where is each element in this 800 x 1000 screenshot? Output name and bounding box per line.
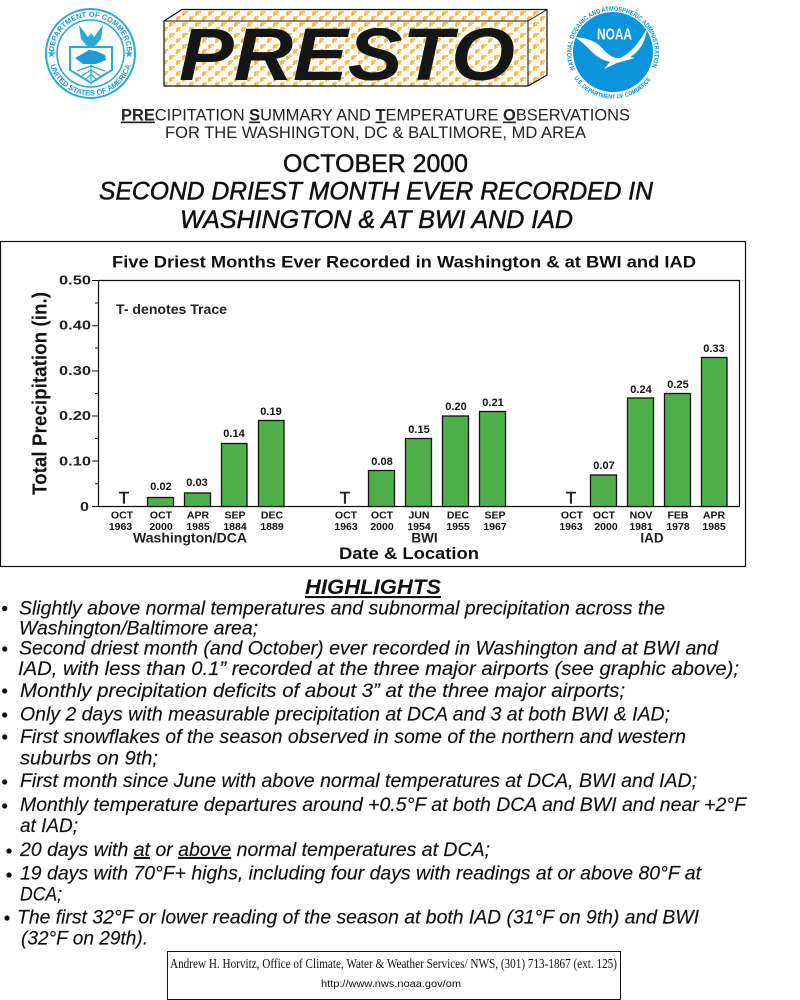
logo: PRESTO 3D block: PRESTO <box>179 13 515 96</box>
bars: Washington/DCA: DEC <box>261 510 284 522</box>
bars: IAD: IAD <box>640 530 664 546</box>
x axis title: Date & Location <box>339 544 479 563</box>
bars: BWI: T <box>340 488 350 508</box>
heading: highlights: HIGHLIGHTS <box>305 576 441 599</box>
panel: precipitation bar chart <box>0 242 746 566</box>
chart title: Five Driest Months Ever Recorded in Washington & at BWI and IAD <box>112 252 696 272</box>
icon: Department of Commerce seal: UNITED STATES OF AMERICA <box>50 64 131 96</box>
bars: Washington/DCA: Washington/DCA <box>133 530 247 546</box>
title: month: OCTOBER 2000 <box>283 150 468 178</box>
subtitle: area: FOR THE WASHINGTON, DC & BALTIMORE, MD AREA <box>165 123 587 142</box>
subtitle: PRESTO acronym: PRECIPITATION SUMMARY AND TEMPERATURE OBSERVATIONS <box>121 106 630 124</box>
bars: BWI: 0.20 <box>445 401 467 413</box>
bars: Washington/DCA: 0.19 <box>260 406 282 418</box>
bars: IAD: 1981 <box>629 521 653 533</box>
bars: Washington/DCA: 0.14 <box>223 428 246 440</box>
y axis and ticks: 0.20 <box>59 409 91 423</box>
bars: BWI: 2000 <box>370 521 394 533</box>
bars: Washington/DCA: 2000 <box>149 521 173 533</box>
bars: Washington/DCA <box>109 406 284 546</box>
bars: IAD: T <box>566 488 576 508</box>
text block: highlights list: Monthly precipitation deficits of about 3” at the three major airports; <box>20 680 625 702</box>
text block: highlights list: First month since June with above normal temperatures at DCA, BWI and IAD; <box>20 770 697 792</box>
bars: BWI: SEP <box>484 510 506 522</box>
text block: highlights list: Monthly temperature departures around +0.5°F at both DCA and BWI and near +2°F <box>20 794 747 816</box>
bars: IAD: OCT <box>561 510 584 522</box>
bars: BWI <box>334 397 507 546</box>
title: headline <box>99 178 654 234</box>
text block: highlights list: 19 days with 70°F+ highs, including four days with readings at or above 80°F at <box>20 862 703 884</box>
bars: Washington/DCA: 0.02 <box>150 481 172 493</box>
bars: BWI: JUN <box>408 510 430 522</box>
footer: author credit box: http://www.nws.noaa.gov/om <box>321 978 461 990</box>
y axis and ticks: 0 <box>80 500 89 514</box>
icon: Department of Commerce seal <box>45 8 136 99</box>
text block: highlights list: Washington/Baltimore area; <box>19 618 258 640</box>
text block: highlights list: Only 2 days with measurable precipitation at DCA and 3 at both BWI & IAD; <box>20 704 670 726</box>
bars: Washington/DCA: T <box>119 488 129 508</box>
y axis and ticks: 0.10 <box>59 454 91 468</box>
bars: BWI: OCT <box>371 510 394 522</box>
text block: highlights list: Second driest month (and October) ever recorded in Washington and at BWI and <box>19 638 719 660</box>
title: headline: SECOND DRIEST MONTH EVER RECORDED IN <box>99 178 654 206</box>
bars: BWI: 1955 <box>446 521 470 533</box>
text block: highlights list: (32°F on 29th). <box>21 928 148 950</box>
y axis title: Total Precipitation (in.) <box>30 292 52 495</box>
text block: highlights list <box>2 598 747 950</box>
footer: author credit box <box>168 952 620 1000</box>
bars: Washington/DCA: 1985 <box>186 521 210 533</box>
note: trace: T- denotes Trace <box>116 301 227 317</box>
y axis and ticks: 0.30 <box>59 364 91 378</box>
y axis and ticks: 0.40 <box>59 318 91 332</box>
bars: IAD: NOV <box>630 510 652 522</box>
icon: NOAA seal: NATIONAL OCEANIC AND ATMOSPHERIC ADMINISTRATION <box>567 6 659 70</box>
bars: Washington/DCA: OCT <box>150 510 173 522</box>
bars: IAD: FEB <box>668 510 689 522</box>
bars: IAD: 0.33 <box>703 343 725 355</box>
bars: Washington/DCA: SEP <box>224 510 246 522</box>
text block: highlights list: suburbs on 9th; <box>20 748 158 770</box>
bars: BWI: OCT <box>335 510 358 522</box>
bars: Washington/DCA: 1889 <box>260 521 284 533</box>
bars: BWI: 1963 <box>334 521 358 533</box>
icon: NOAA seal: U.S. DEPARTMENT OF COMMERCE <box>574 76 651 99</box>
icon: NOAA seal: NOAA <box>597 26 632 44</box>
bars: Washington/DCA: 1963 <box>109 521 132 533</box>
bars: IAD: 0.07 <box>593 460 615 472</box>
text block: highlights list: IAD, with less than 0.1” recorded at the three major airports (see graphic above); <box>18 658 739 680</box>
bars: IAD: 0.24 <box>630 384 653 396</box>
bars: IAD: OCT <box>593 510 616 522</box>
bars: IAD: 1978 <box>666 521 690 533</box>
bars: BWI: DEC <box>447 510 470 522</box>
bars: IAD: 1963 <box>559 521 583 533</box>
icon: NOAA seal <box>567 6 659 99</box>
bars: IAD: 1985 <box>702 521 726 533</box>
text block: highlights list: Slightly above normal temperatures and subnormal precipitation across the <box>19 598 665 620</box>
y axis and ticks: 0.50 <box>59 274 91 288</box>
text block: highlights list: at IAD; <box>20 815 78 837</box>
y axis and ticks <box>59 274 740 514</box>
bars: Washington/DCA: OCT <box>111 510 134 522</box>
bars: BWI: 0.08 <box>371 456 393 468</box>
bars: IAD: APR <box>703 510 726 522</box>
bars: IAD: 0.25 <box>667 379 689 391</box>
text block: highlights list: First snowflakes of the season observed in some of the northern and western <box>20 726 686 748</box>
bars: BWI: 1967 <box>483 521 507 533</box>
bars: Washington/DCA: 1884 <box>223 521 247 533</box>
text block: highlights list: 20 days with at or above normal temperatures at DCA; <box>19 839 490 861</box>
bars: IAD: 2000 <box>594 521 618 533</box>
text block: highlights list: DCA; <box>20 884 62 906</box>
title: headline: WASHINGTON & AT BWI AND IAD <box>180 206 573 234</box>
bars: Washington/DCA: APR <box>187 510 210 522</box>
text block: highlights list: The first 32°F or lower reading of the season at both IAD (31°F on 9th) and BWI <box>17 906 700 928</box>
bars: BWI: 0.15 <box>408 424 430 436</box>
footer: author credit box: Andrew H. Horvitz, Office of Climate, Water & Weather Services/ NWS, (301) 713-1867 (ext. 125) <box>170 956 617 971</box>
icon: Department of Commerce seal: DEPARTMENT OF COMMERCE <box>48 12 132 52</box>
bars: BWI: BWI <box>411 530 438 546</box>
bars: Washington/DCA: 0.03 <box>186 477 208 489</box>
bars: BWI: 0.21 <box>482 397 504 409</box>
bars: BWI: 1954 <box>407 521 431 533</box>
bars: IAD <box>559 343 727 546</box>
